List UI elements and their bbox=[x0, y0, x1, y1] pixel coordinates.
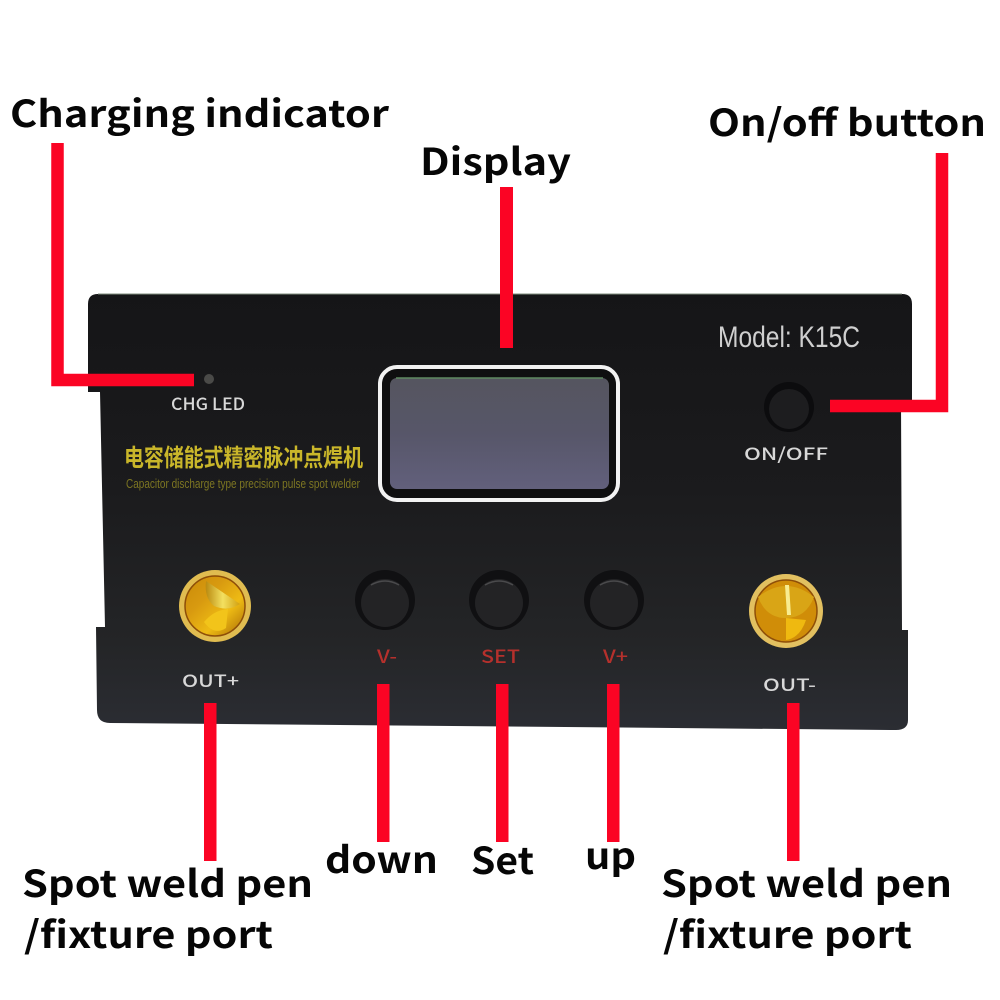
icon: charging LED bbox=[204, 374, 214, 384]
V+ button bbox=[584, 570, 644, 630]
display screen bbox=[380, 367, 618, 500]
OUT+ label: OUT+ bbox=[182, 667, 239, 692]
Chinese product name: 电容储能式精密脉冲点焊机 bbox=[124, 438, 363, 473]
arrow: on/off leader bbox=[830, 153, 942, 406]
label: left port: /fixture port bbox=[24, 905, 273, 959]
panel: black device faceplate bbox=[88, 294, 912, 730]
arrow: charging indicator leader bbox=[58, 143, 194, 380]
arrow: set leader bbox=[496, 684, 508, 842]
label: down: down bbox=[325, 830, 438, 884]
heading: on/off button: On/off button bbox=[708, 93, 986, 147]
arrow: up leader bbox=[607, 684, 620, 842]
label: right port: Spot weld pen bbox=[661, 854, 952, 908]
model label: Model: K15C bbox=[718, 321, 860, 354]
arrow: left port leader bbox=[204, 703, 216, 861]
label: up: up bbox=[585, 826, 636, 880]
OUT- label: OUT- bbox=[763, 671, 816, 696]
arrow: display leader bbox=[500, 187, 513, 348]
ON/OFF label: ON/OFF bbox=[744, 440, 828, 465]
arrow: right port leader bbox=[787, 703, 800, 861]
CHG LED label: CHG LED bbox=[171, 390, 245, 415]
label: left port bbox=[22, 854, 313, 959]
label: set: Set bbox=[471, 831, 534, 885]
label: left port: Spot weld pen bbox=[22, 854, 313, 908]
on/off button bbox=[764, 382, 814, 432]
V+ label: V+ bbox=[602, 643, 628, 669]
heading: display: Display bbox=[420, 132, 571, 186]
V- button bbox=[355, 570, 415, 630]
arrow: down leader bbox=[377, 684, 390, 842]
label: right port: /fixture port bbox=[663, 905, 912, 959]
SET button bbox=[469, 570, 529, 630]
V- label: V- bbox=[376, 643, 397, 669]
right brass terminal bbox=[749, 574, 823, 648]
English product name: Capacitor discharge type precision pulse spot welder bbox=[126, 476, 361, 491]
heading: charging indicator: Charging indicator bbox=[10, 84, 390, 138]
label: right port bbox=[661, 854, 952, 959]
left brass terminal bbox=[179, 570, 251, 642]
SET label: SET bbox=[481, 643, 520, 669]
